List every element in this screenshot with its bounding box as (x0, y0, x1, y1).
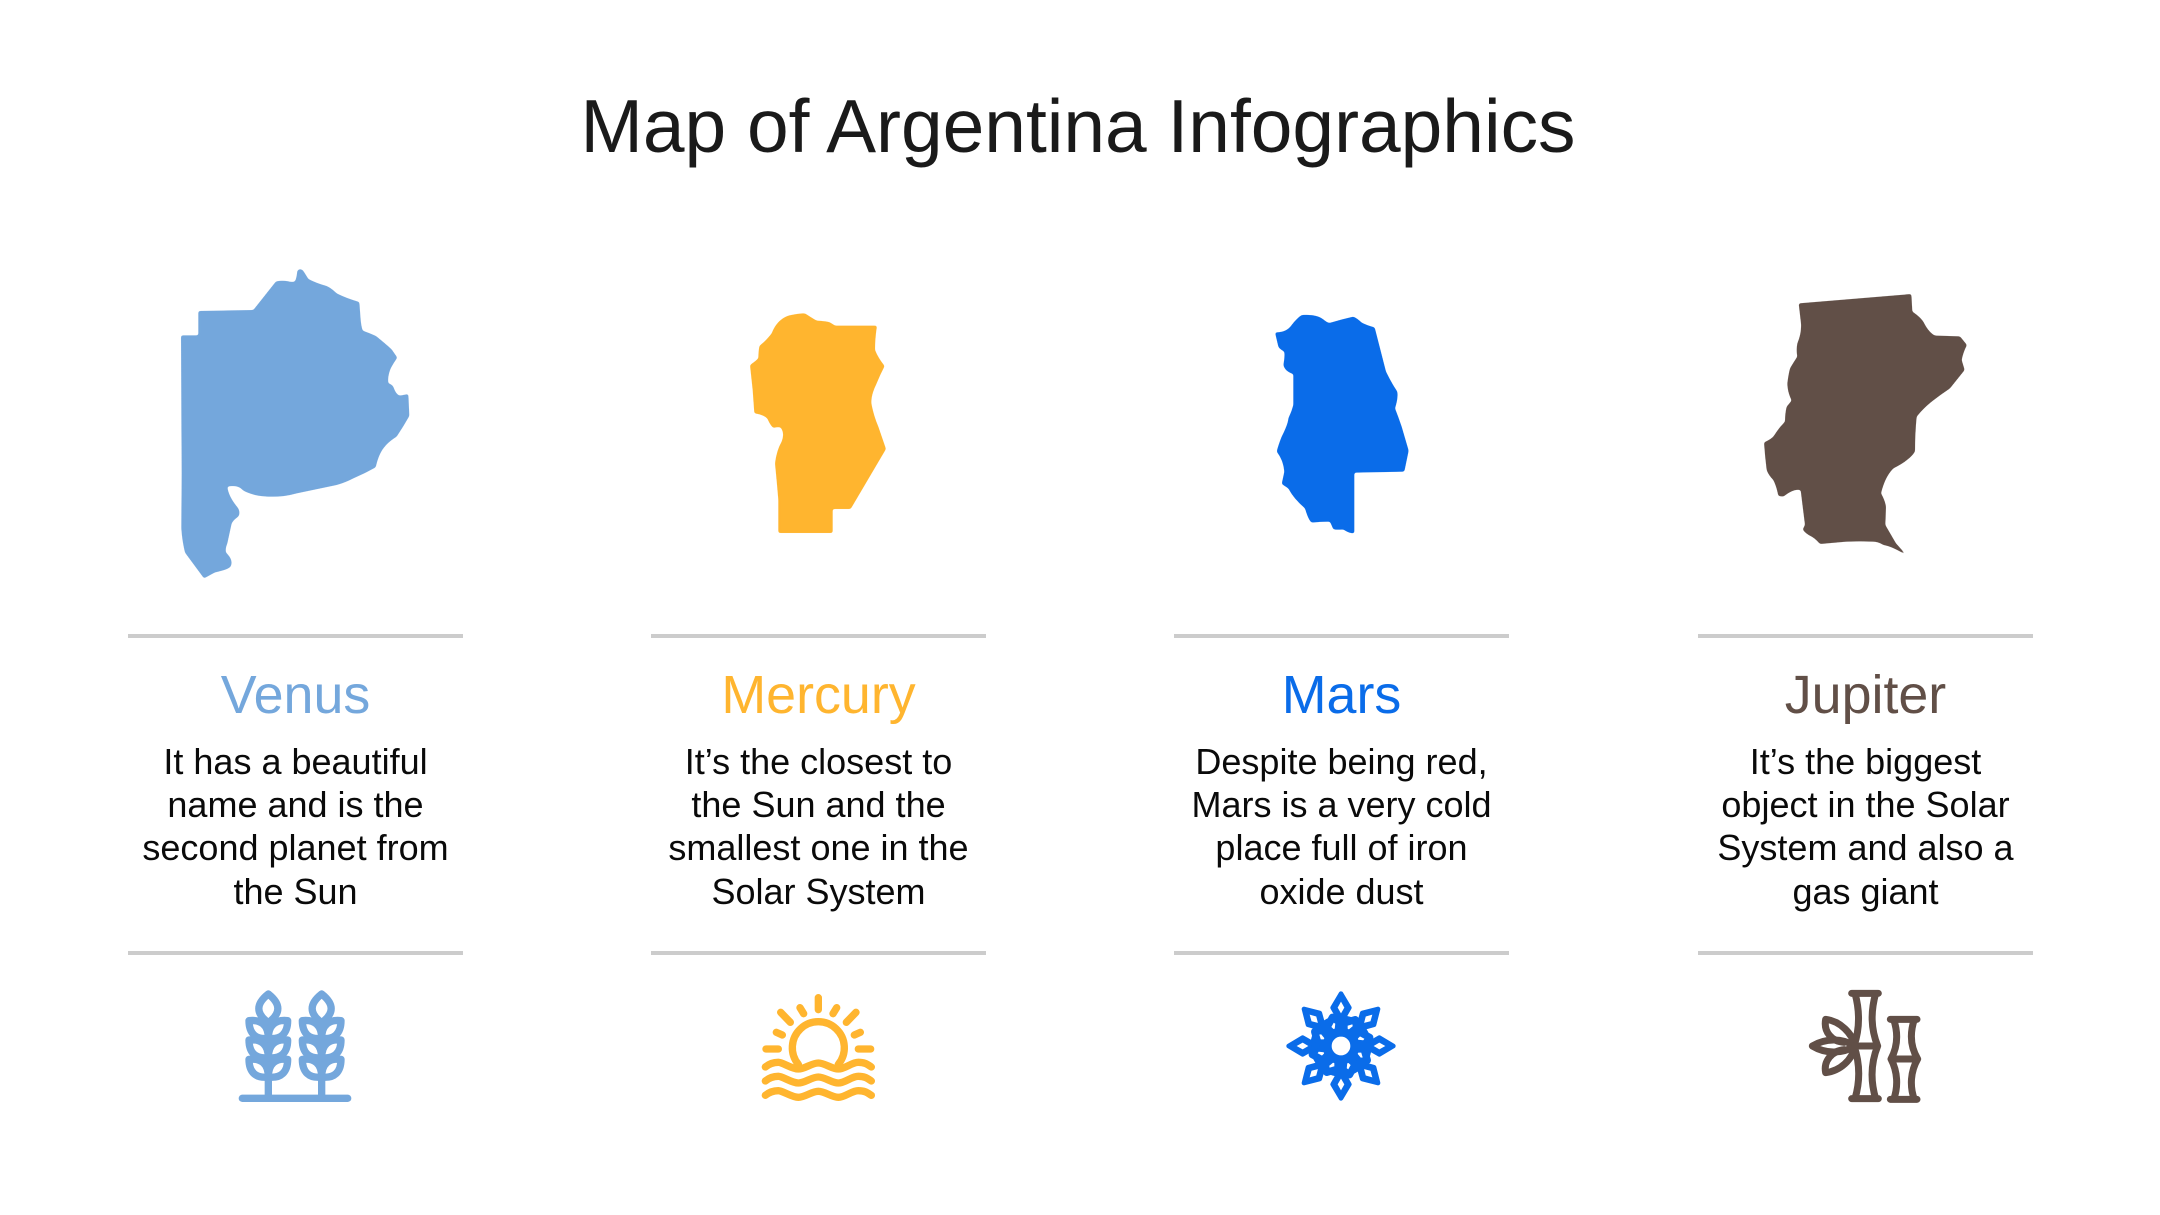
text block: Jupiter: System and also a (1717, 827, 2014, 868)
text block: Mercury: smallest one in the (668, 827, 969, 868)
panel: Mars text (1174, 634, 1509, 955)
text block: Mercury: the Sun and the (691, 784, 946, 825)
text block: Mercury (668, 741, 969, 912)
text block: Venus: It has a beautiful (163, 741, 428, 782)
text block: Mars: Despite being red, (1195, 741, 1488, 782)
icon: snowflake (1289, 994, 1393, 1098)
title: Map of Argentina Infographics (580, 84, 1576, 168)
wheat stalk right (302, 994, 341, 1098)
panel: Mercury text (651, 634, 986, 955)
text block: Jupiter: object in the Solar (1721, 784, 2010, 825)
icon: bamboo (1812, 993, 1918, 1099)
text block: Mars: oxide dust (1259, 871, 1424, 912)
text block: Jupiter: It’s the biggest (1750, 741, 1981, 782)
icon: sun over waves (765, 998, 871, 1097)
heading: Jupiter: Jupiter (1785, 665, 1946, 725)
text block: Jupiter: gas giant (1792, 871, 1939, 912)
text block: Mercury: It’s the closest to (685, 741, 952, 782)
text block: Venus (142, 741, 449, 912)
map: Cordoba province (Mercury) (750, 313, 886, 533)
text block: Mars (1191, 741, 1492, 912)
map: Mendoza province (Mars) (1275, 315, 1409, 533)
text block: Venus: name and is the (167, 784, 424, 825)
heading: Venus: Venus (221, 665, 370, 725)
text block: Venus: the Sun (233, 871, 358, 912)
text block: Mars: Mars is a very cold (1191, 784, 1492, 825)
heading: Mars: Mars (1282, 665, 1401, 725)
text block: Venus: second planet from (142, 827, 449, 868)
map: San Juan province (Jupiter) (1764, 294, 1967, 556)
wheat stalk left (249, 994, 288, 1098)
map: Buenos Aires province (Venus) (181, 269, 409, 578)
panel: Jupiter text (1698, 634, 2033, 955)
icon: wheat (242, 994, 348, 1098)
panel: Venus text (128, 634, 463, 955)
heading: Mercury: Mercury (721, 665, 916, 725)
text block: Mars: place full of iron (1215, 827, 1468, 868)
text block: Mercury: Solar System (711, 871, 926, 912)
text block: Jupiter (1717, 741, 2014, 912)
